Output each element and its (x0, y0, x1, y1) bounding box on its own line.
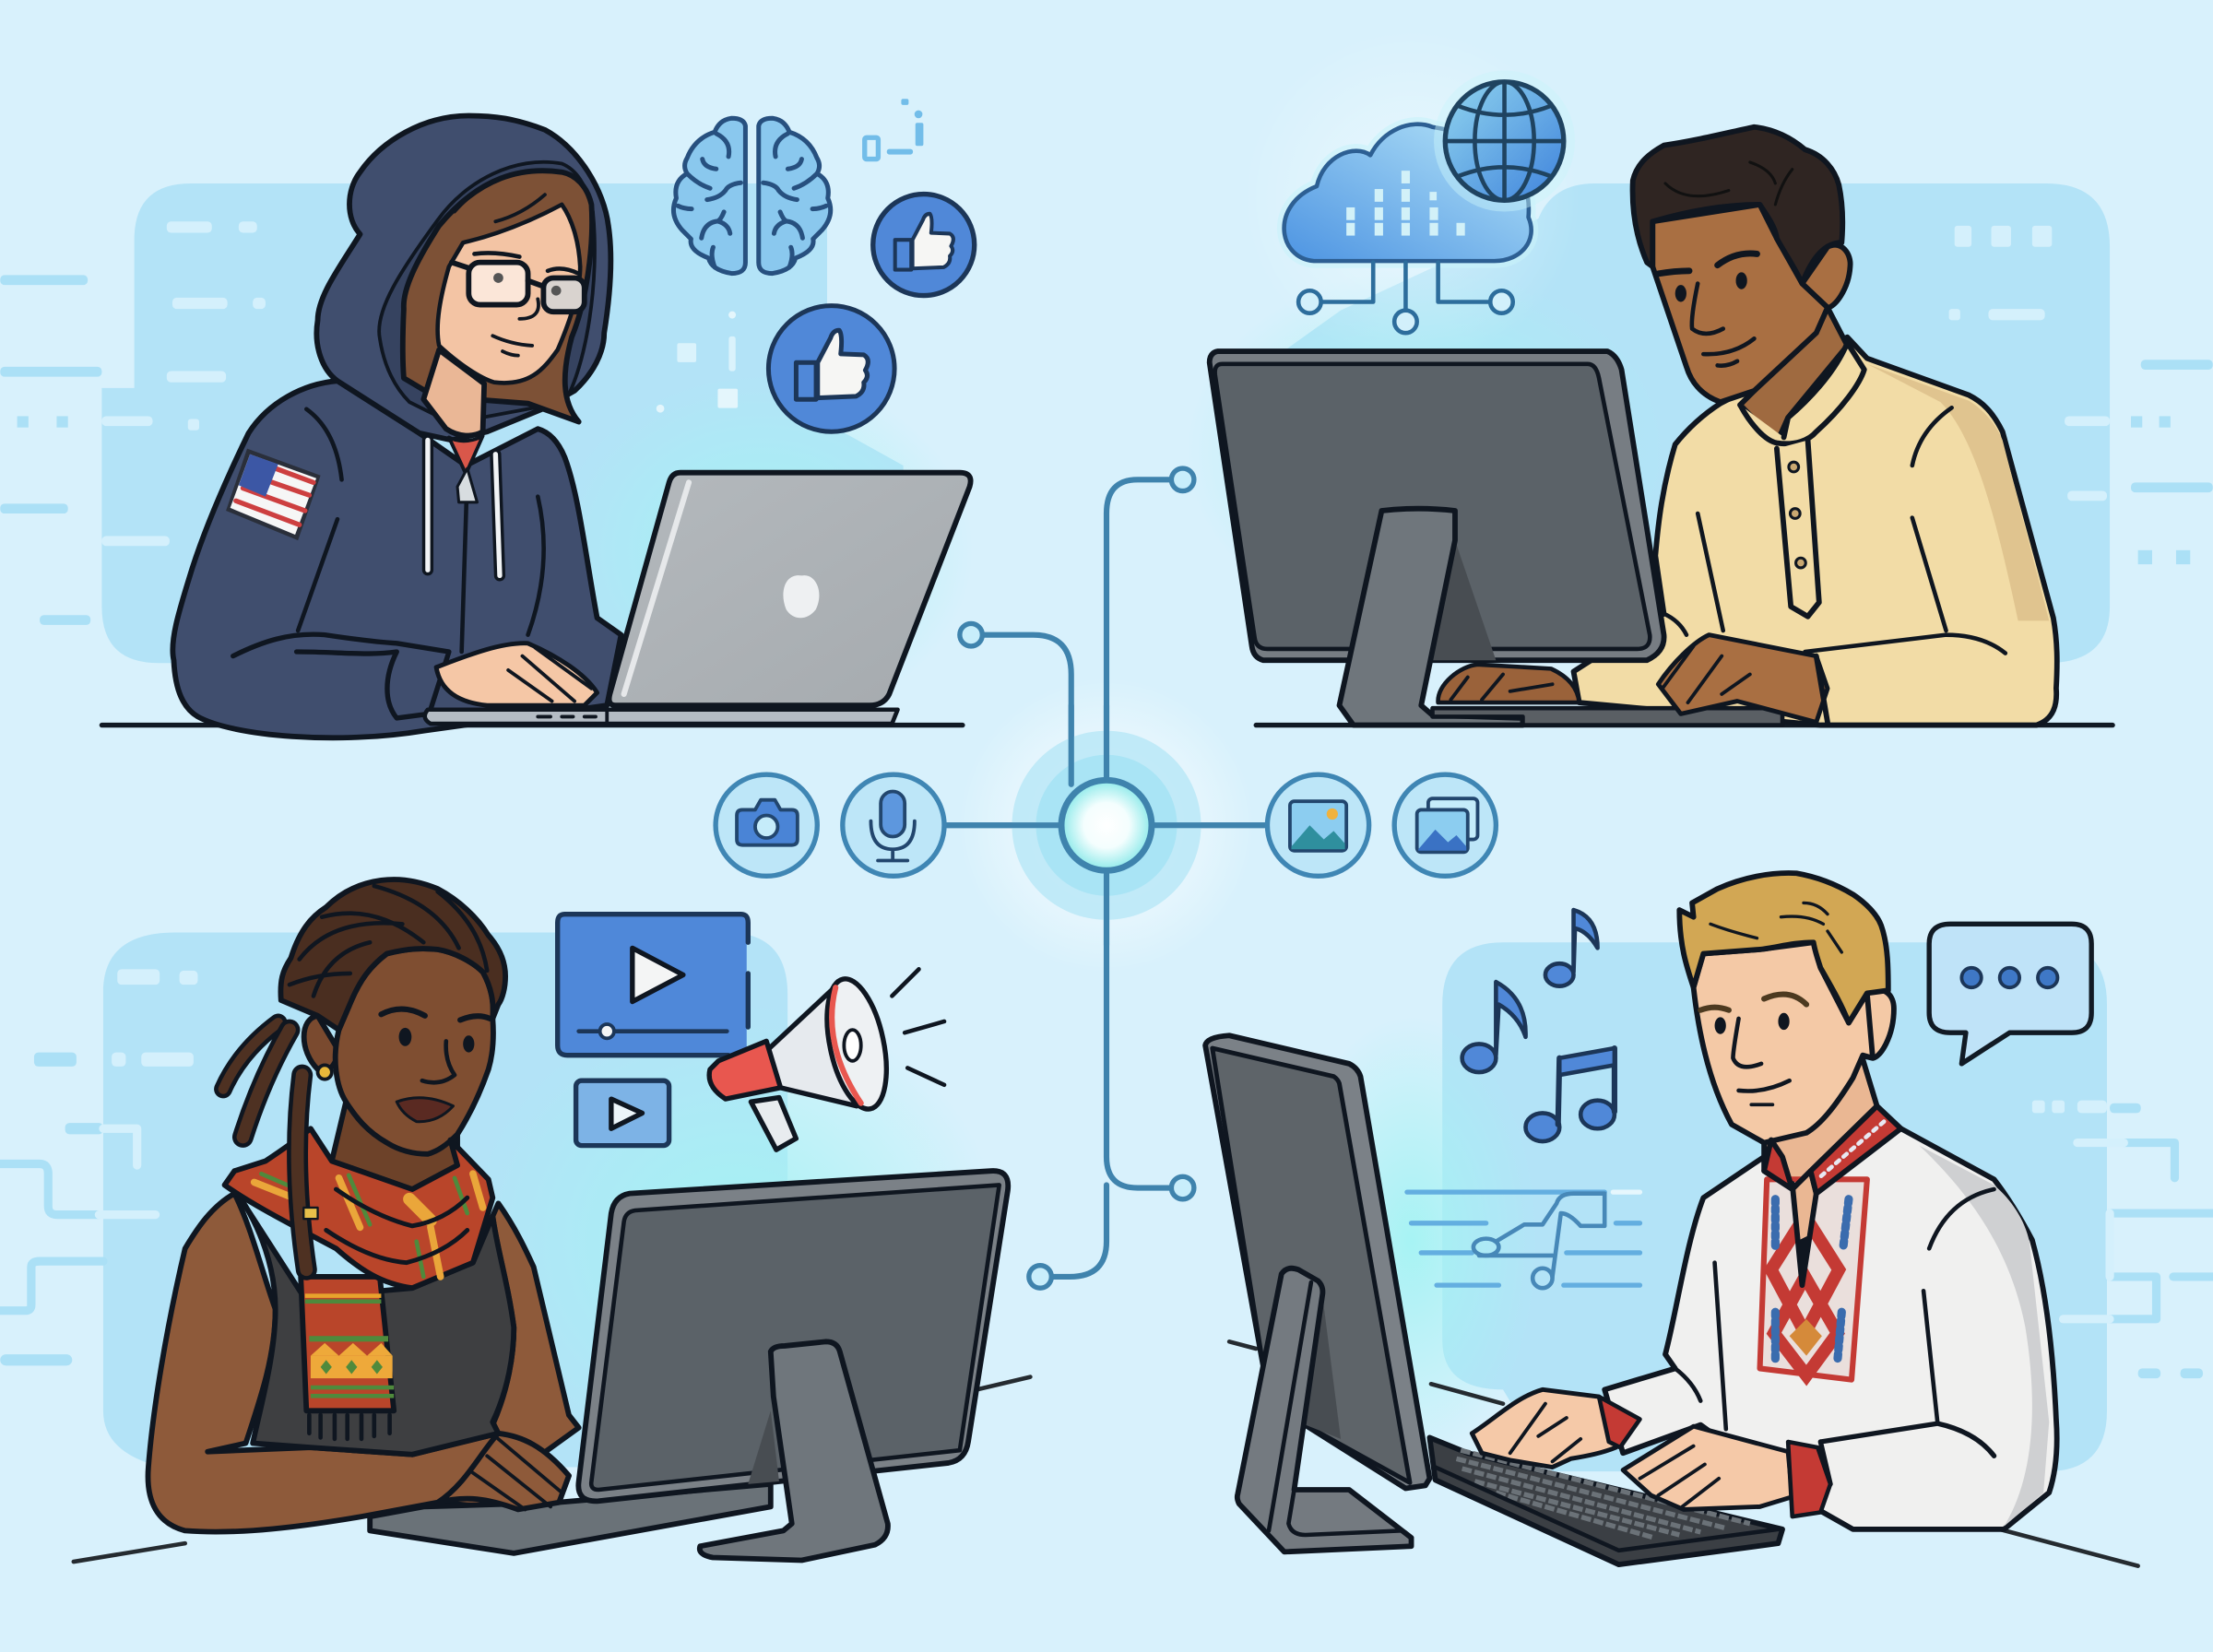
person: woman with braids and scarf (148, 879, 1008, 1561)
monitor stand (1237, 1268, 1412, 1552)
desk lines bottom right (1229, 1341, 2138, 1566)
icon: small video (576, 1080, 669, 1146)
desk line top right (1256, 724, 2112, 726)
neck (332, 1102, 457, 1189)
panel: bottom right backdrop (1442, 942, 2107, 1471)
person: man in cream kurta at monitor (1210, 127, 2057, 726)
eyes nose and mouth (474, 253, 579, 356)
shirt (1604, 1128, 2057, 1529)
collar (1740, 343, 1864, 443)
laptop screen (609, 473, 971, 705)
monitor stand (700, 1341, 888, 1561)
right sleeve (1805, 635, 2006, 654)
monitor stand (1340, 509, 1522, 726)
monitor (1205, 1035, 1429, 1488)
icon: camera (716, 774, 817, 876)
flag patch (226, 449, 321, 540)
earring (318, 1065, 332, 1080)
left collar (1764, 1139, 1793, 1189)
zipper pull (457, 468, 477, 502)
braid bead (303, 1208, 318, 1219)
shirt folds (1663, 407, 1952, 635)
eyes (1715, 1013, 1790, 1034)
stand shadow (1306, 1295, 1341, 1439)
fingers (508, 647, 591, 702)
neck opening shadow (1796, 1234, 1811, 1285)
light circuit traces on panels (99, 1128, 2124, 1319)
hair strands (1710, 903, 1841, 952)
stand shadow (748, 1410, 779, 1484)
icon: large thumbs up (768, 306, 894, 431)
buttons (1789, 462, 1805, 568)
embroidered cuffs (1599, 1397, 1639, 1447)
hair (280, 879, 505, 1030)
keyboard (1433, 708, 1782, 726)
panel: top left backdrop (101, 183, 904, 663)
right hand (1623, 1426, 1793, 1509)
face (336, 949, 493, 1154)
glow patches behind the screens (466, 29, 1665, 1481)
icon: globe (1434, 71, 1575, 212)
left sleeve (1604, 1368, 1700, 1401)
monitor (578, 1171, 1008, 1501)
monitor (1210, 351, 1664, 660)
braid rows (290, 886, 487, 996)
embroidery pattern (1771, 1199, 1849, 1375)
collar beadwork (1820, 1122, 1884, 1176)
finger lines (1450, 646, 1750, 702)
desk lines bottom left (74, 1377, 1030, 1562)
hair strand (455, 181, 545, 221)
facial features (381, 1009, 490, 1082)
keyboard keys (1457, 1450, 1750, 1538)
icon: video player (558, 914, 748, 1056)
hood (316, 115, 610, 440)
keyboard (370, 1484, 771, 1553)
left hand (1438, 665, 1580, 702)
tail bands (305, 1293, 394, 1398)
face (1652, 205, 1828, 402)
scarf stripes (254, 1174, 483, 1277)
sleeveless top (237, 1194, 514, 1455)
ear (1860, 990, 1894, 1058)
placket (1777, 440, 1819, 617)
scarf tail (301, 1277, 394, 1410)
hair (1633, 127, 1842, 284)
motion music note (1407, 1192, 1639, 1288)
back locks (223, 1022, 290, 1137)
hair strands (1665, 162, 1793, 205)
icon: music notes (1462, 910, 1615, 1141)
scarf fringe (309, 1415, 390, 1439)
keyboard (1429, 1437, 1782, 1564)
stand shadow (1426, 540, 1496, 660)
central hub (946, 705, 1264, 945)
ear (1802, 245, 1851, 308)
icon: microphone (843, 774, 944, 876)
face (438, 205, 580, 383)
shirt shading (1919, 1146, 2049, 1527)
hair (1679, 873, 1888, 1022)
facial features (1658, 254, 1757, 366)
neck (423, 350, 484, 436)
right sleeve top (1820, 1423, 1994, 1484)
eyes (399, 1028, 474, 1053)
connector lines (946, 479, 1264, 1277)
hoodie strings (428, 440, 500, 575)
right upper arm (492, 1203, 579, 1453)
monitor back (1213, 1048, 1410, 1482)
scarf folds (326, 1189, 467, 1263)
finger lines (473, 1439, 562, 1509)
icon: small thumbs up (873, 195, 975, 296)
neck (1740, 308, 1847, 443)
laptop trackpad marks (538, 710, 607, 724)
scarf wrap (225, 1128, 492, 1288)
hand (436, 643, 598, 705)
tee neckline (449, 436, 483, 474)
hood interior (379, 162, 595, 423)
connector end nodes (960, 468, 1194, 1288)
panel: bottom left backdrop (103, 933, 787, 1468)
person: woman in hoodie with laptop (172, 115, 971, 738)
icon: cloud network (1284, 124, 1532, 333)
icon: brain (673, 118, 831, 274)
cuff edge (1817, 656, 1828, 723)
keyboard front edge (1436, 1468, 1778, 1551)
right fingers (1639, 1446, 1719, 1506)
floating data bits (657, 99, 923, 413)
shirt shading (1867, 364, 2049, 620)
eyes (1675, 272, 1747, 301)
chest embroidery panel (1760, 1179, 1867, 1380)
shirt folds (1715, 1189, 1994, 1429)
lips (396, 1098, 453, 1122)
laptop logo (783, 575, 819, 618)
decorative dashes on background (0, 275, 2213, 1378)
face (1694, 942, 1873, 1143)
decorative dashes on panels (101, 221, 2110, 1113)
person: man in embroidered shirt at keyboard (1205, 873, 2057, 1564)
front braid (298, 1075, 306, 1269)
laptop base (425, 710, 898, 724)
stand inner line (1269, 1282, 1402, 1535)
icon: megaphone (709, 969, 944, 1150)
shirt (1574, 337, 2057, 726)
sleeve (233, 634, 449, 718)
desk line top left (101, 724, 963, 726)
icon: image (1267, 774, 1369, 876)
monitor back (1215, 364, 1650, 649)
left arm (148, 1194, 569, 1532)
neck (1764, 1059, 1877, 1189)
right hand (1658, 635, 1828, 723)
left hand (1472, 1389, 1615, 1468)
hoodie body (172, 381, 621, 738)
icon: image gallery (1394, 774, 1496, 876)
decorative circuit traces (0, 1143, 2213, 1319)
icon: chat bubble (1929, 924, 2091, 1064)
left fingers (1510, 1404, 1580, 1461)
hair (403, 171, 592, 422)
monitor back (591, 1185, 1000, 1490)
glasses (452, 263, 585, 312)
zipper and creases (298, 409, 544, 652)
right cuff (1788, 1442, 1830, 1516)
panel: top right backdrop (1242, 183, 2110, 663)
neck opening (1793, 1171, 1817, 1285)
hand and forearm (438, 1434, 569, 1509)
ear (304, 1016, 339, 1071)
collar embroidery (1811, 1106, 1901, 1194)
facial features (1700, 995, 1806, 1104)
